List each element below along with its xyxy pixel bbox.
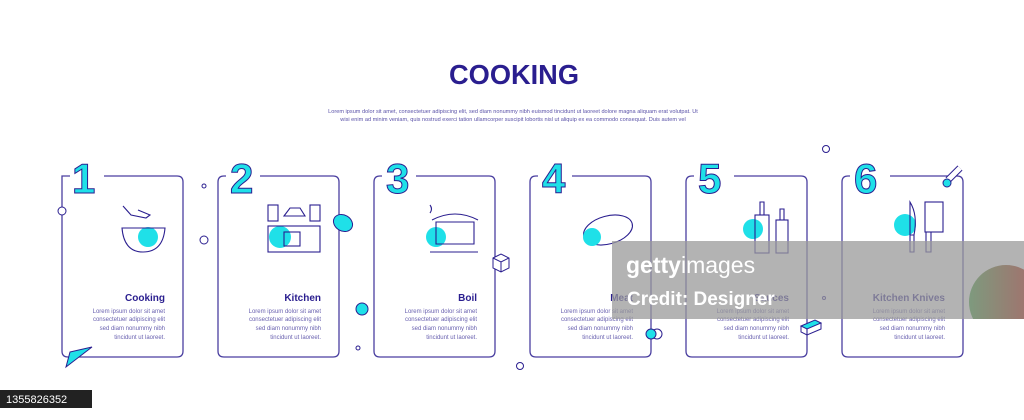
card 4: 4: [542, 155, 566, 202]
card 3: [374, 155, 495, 357]
id tag: [0, 390, 92, 408]
icon: bowl: [122, 206, 165, 252]
intro text: [328, 109, 698, 123]
icon: kitchen: [268, 205, 320, 252]
card 6: sed diam nonummy nibh: [880, 326, 945, 332]
intro text: wisi enim ad minim veniam, quis nostrud exerci tation ullamcorper suscipit lobortis nisl ut aliquip ex ea commodo consequat. Duis autem vel: [339, 117, 686, 123]
card 5: Lorem ipsum dolor sit amet: [717, 309, 789, 315]
card 5: 5: [698, 155, 721, 202]
card 5: Sauces: [754, 293, 789, 304]
icon: pot: [426, 205, 478, 252]
card 6: 6: [854, 155, 877, 202]
card 2: 2: [230, 155, 253, 202]
card 2: tincidunt ut laoreet.: [270, 335, 321, 341]
icon: bottles: [743, 202, 788, 253]
card 3: sed diam nonummy nibh: [412, 326, 477, 332]
card 4: Lorem ipsum dolor sit amet: [561, 309, 633, 315]
card 2: sed diam nonummy nibh: [256, 326, 321, 332]
card 4: sed diam nonummy nibh: [568, 326, 633, 332]
card 1: sed diam nonummy nibh: [100, 326, 165, 332]
card 2: Kitchen: [284, 293, 321, 304]
card 5: [686, 155, 807, 357]
card 3: 3: [386, 155, 409, 202]
card 4: consectetuer adipiscing elit: [561, 317, 633, 323]
icon: steak: [580, 210, 636, 250]
card 3: Boil: [458, 293, 477, 304]
card 1: tincidunt ut laoreet.: [114, 335, 165, 341]
card 4: tincidunt ut laoreet.: [582, 335, 633, 341]
card 4: [530, 155, 651, 357]
watermark band: [612, 241, 1024, 319]
card 1: Lorem ipsum dolor sit amet: [93, 309, 165, 315]
card 1: 1: [72, 155, 95, 202]
title: COOKING: [449, 59, 579, 90]
decorative shapes: [58, 146, 960, 370]
card 6: Kitchen Knives: [873, 293, 945, 304]
card 5: consectetuer adipiscing elit: [717, 317, 789, 323]
card 6: tincidunt ut laoreet.: [894, 335, 945, 341]
watermark band: Credit: Designer: [627, 289, 775, 310]
card 3: tincidunt ut laoreet.: [426, 335, 477, 341]
intro text: Lorem ipsum dolor sit amet, consectetuer adipiscing elit, sed diam nonummy nibh euismod tincidunt ut laoreet dolore magna aliquam erat volutpat. Ut: [328, 109, 698, 115]
card 3: Lorem ipsum dolor sit amet: [405, 309, 477, 315]
card 6: Lorem ipsum dolor sit amet: [873, 309, 945, 315]
card 6: [842, 155, 963, 357]
card 6: consectetuer adipiscing elit: [873, 317, 945, 323]
card 5: tincidunt ut laoreet.: [738, 335, 789, 341]
card 2: [218, 155, 339, 357]
card 2: consectetuer adipiscing elit: [249, 317, 321, 323]
card 4: Meat: [610, 293, 634, 304]
card 1: Cooking: [125, 293, 165, 304]
card 3: consectetuer adipiscing elit: [405, 317, 477, 323]
watermark band: gettyimages: [626, 252, 755, 278]
card 1: [62, 155, 183, 357]
card 5: sed diam nonummy nibh: [724, 326, 789, 332]
icon: knives: [894, 202, 943, 252]
id tag: 1355826352: [6, 394, 67, 406]
card 2: Lorem ipsum dolor sit amet: [249, 309, 321, 315]
card 1: consectetuer adipiscing elit: [93, 317, 165, 323]
